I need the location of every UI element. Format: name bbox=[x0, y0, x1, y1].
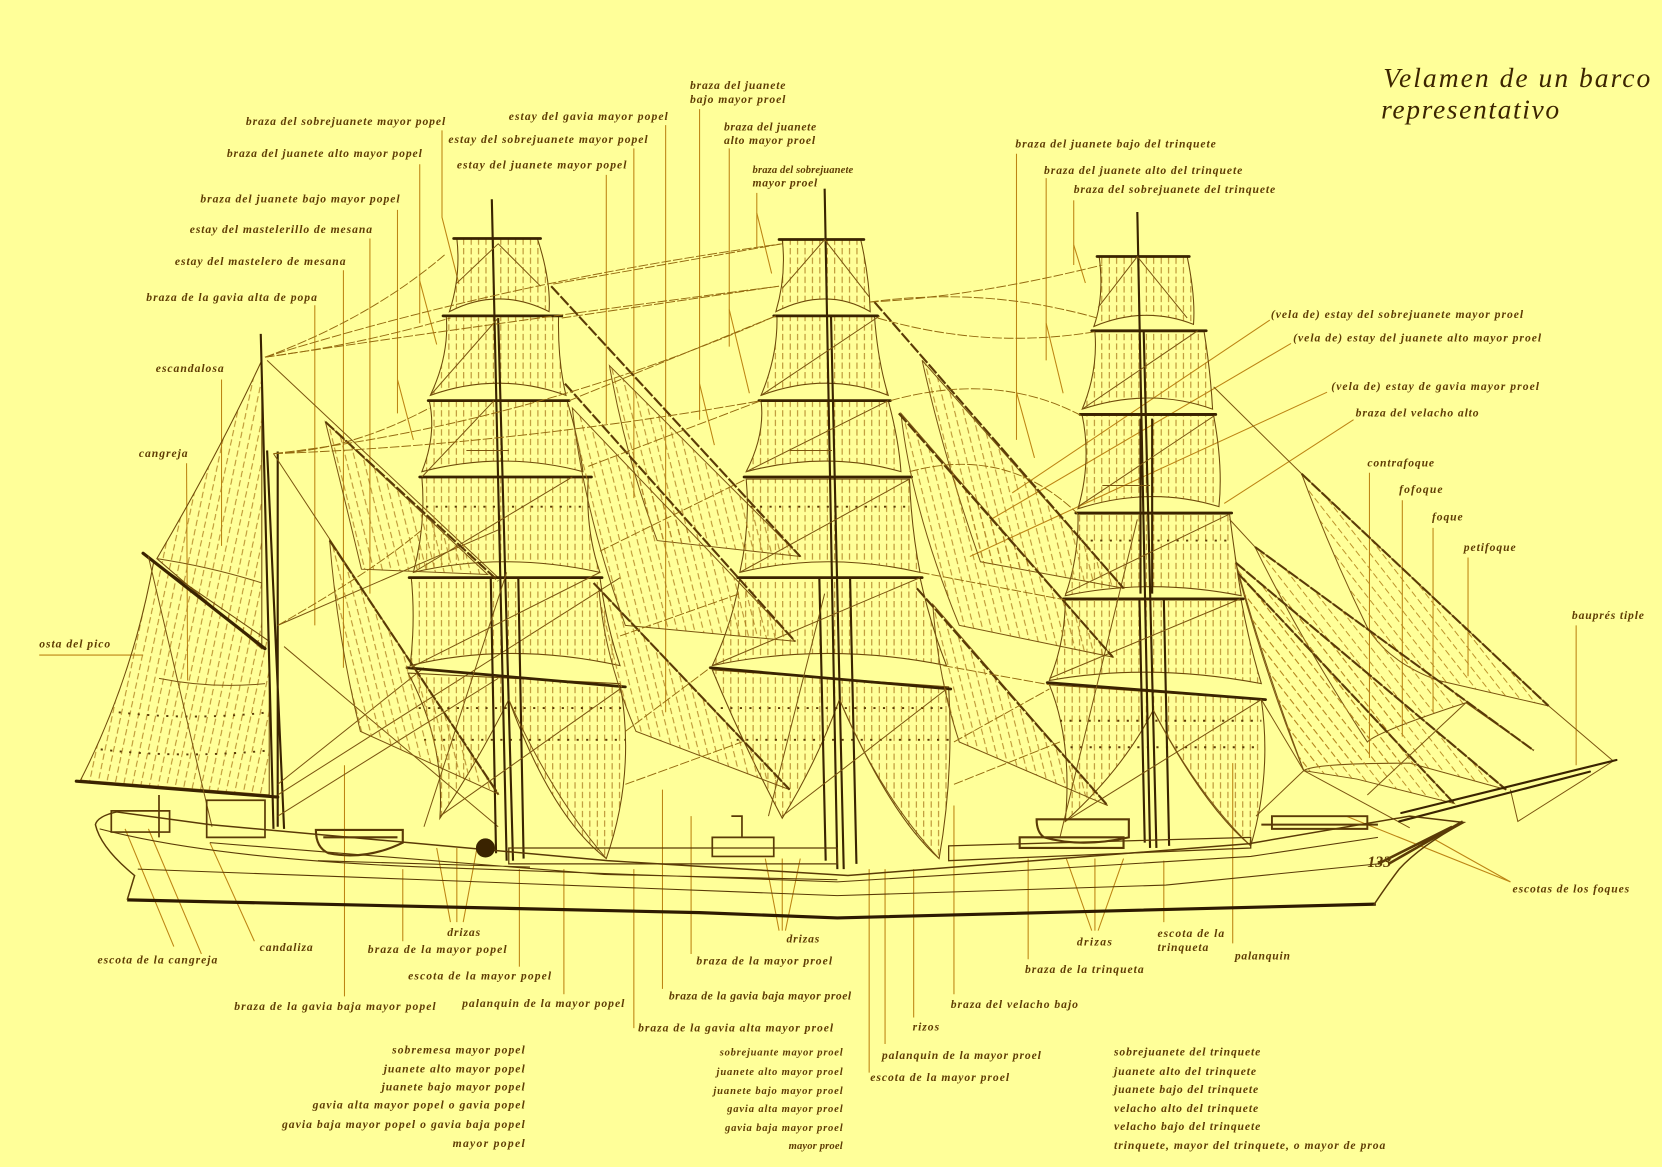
label: escota de la cangreja bbox=[98, 953, 217, 966]
label: juanete bajo mayor popel bbox=[380, 1081, 525, 1094]
label: estay del gavia mayor popel bbox=[509, 110, 669, 123]
staysail: mizzen to mast 1 lower bbox=[330, 541, 498, 794]
sail: mayor proel bbox=[712, 670, 950, 859]
label: trinqueta bbox=[1157, 941, 1209, 954]
label: juanete alto mayor popel bbox=[382, 1063, 525, 1076]
sail: gavia baja mayor proel bbox=[712, 578, 947, 666]
bold stays bbox=[325, 286, 1124, 806]
label: velacho alto del trinquete bbox=[1114, 1102, 1258, 1115]
sail: gavia baja mayor popel bbox=[410, 578, 620, 666]
staysail: mast 2 to 3 lower bbox=[933, 604, 1108, 806]
label: (vela de) estay del juanete alto mayor proel bbox=[1293, 331, 1542, 344]
label: cangreja bbox=[139, 447, 188, 460]
label: juanete alto mayor proel bbox=[715, 1067, 843, 1078]
label: escotas de los foques bbox=[1513, 882, 1630, 895]
reef bands bbox=[1060, 541, 1261, 747]
label: braza del velacho alto bbox=[1356, 407, 1479, 420]
staysail: mast 1 to 2 upper bbox=[609, 366, 800, 556]
label: rizos bbox=[913, 1020, 940, 1033]
gaff and boom bbox=[76, 553, 278, 797]
label: braza del juanete alto del trinquete bbox=[1044, 164, 1242, 177]
hull number: 133 bbox=[1367, 854, 1391, 871]
sail: trinquete bbox=[1049, 685, 1265, 846]
label: braza de la mayor popel bbox=[368, 943, 507, 956]
label: foque bbox=[1432, 510, 1463, 523]
sail list: mayor proel bbox=[711, 1048, 843, 1152]
staysail: mizzen to mast 1 upper bbox=[325, 422, 488, 574]
staysail: mast 2 to 3 upper bbox=[922, 360, 1124, 588]
label: braza de la gavia baja mayor proel bbox=[669, 990, 852, 1003]
label: gavia alta mayor popel o gavia popel bbox=[312, 1099, 525, 1112]
label: escota de la mayor popel bbox=[408, 969, 552, 982]
sail: gavia alta mayor proel bbox=[740, 479, 920, 572]
label: gavia baja mayor popel o gavia baja popel bbox=[281, 1118, 525, 1131]
sail: juanete bajo del trinquete bbox=[1078, 415, 1220, 509]
reef bands bbox=[721, 507, 949, 740]
label: braza del sobrejuanete mayor popel bbox=[246, 115, 446, 128]
label: osta del pico bbox=[39, 638, 110, 651]
label: braza de la gavia alta de popa bbox=[146, 291, 317, 304]
boat on deck near mizzen bbox=[316, 830, 403, 855]
yards bbox=[1047, 257, 1266, 700]
title line 2: representativo bbox=[1381, 94, 1559, 125]
deck house mid bbox=[712, 816, 774, 856]
label: velacho bajo del trinquete bbox=[1114, 1120, 1260, 1133]
label: alto mayor proel bbox=[724, 134, 816, 147]
mizzen mast and gaff sails bbox=[76, 334, 620, 829]
label: braza del juanete bajo del trinquete bbox=[1015, 137, 1216, 150]
label: escandalosa bbox=[156, 362, 224, 375]
mast 1 square sails bbox=[407, 199, 626, 861]
label: braza de la mayor proel bbox=[696, 955, 833, 968]
jib sails and bowsprit bbox=[1214, 387, 1616, 828]
label: palanquin de la mayor proel bbox=[881, 1049, 1042, 1062]
staysail: mast 2 to 3 middle bbox=[901, 413, 1113, 657]
sail: contrafoque bbox=[1238, 573, 1454, 803]
jib stays bbox=[1236, 474, 1549, 803]
cangreja reef bands bbox=[101, 712, 269, 754]
sheer lines bbox=[100, 829, 1378, 896]
labels top left bbox=[39, 115, 446, 651]
label: braza del sobrejuanete del trinquete bbox=[1074, 183, 1275, 196]
figurehead bbox=[1378, 821, 1463, 864]
mast bbox=[1137, 212, 1169, 848]
label: bauprés tiple bbox=[1572, 609, 1644, 622]
label: candaliza bbox=[260, 941, 313, 954]
staysail: mast 1 to 2 middle bbox=[572, 408, 795, 641]
staysail: mast 1 to 2 lower bbox=[599, 588, 790, 790]
leader lines bbox=[39, 109, 1576, 1073]
keel bbox=[127, 900, 1376, 918]
label: drizas bbox=[447, 926, 481, 939]
label: braza del sobrejuanete bbox=[753, 165, 854, 176]
sail: escandalosa bbox=[157, 360, 262, 649]
sail list: trinquete bbox=[1112, 1046, 1386, 1152]
label: braza de la gavia alta mayor proel bbox=[638, 1021, 834, 1034]
label: contrafoque bbox=[1367, 456, 1434, 469]
label: braza del juanete bbox=[690, 79, 785, 92]
labels top centre bbox=[448, 79, 854, 190]
label: (vela de) estay de gavia mayor proel bbox=[1331, 380, 1540, 393]
label: estay del mastelero de mesana bbox=[175, 255, 346, 268]
staysails between masts bbox=[325, 286, 1124, 806]
label: fofoque bbox=[1399, 483, 1443, 496]
yards bbox=[407, 238, 625, 687]
label: escota de la mayor proel bbox=[870, 1071, 1010, 1084]
sail: juanete bajo mayor popel bbox=[422, 401, 583, 472]
sail: velacho bajo del trinquete bbox=[1049, 600, 1261, 684]
sail: petifoque bbox=[1302, 474, 1549, 706]
mizzen mast bbox=[261, 334, 284, 829]
sail: foque bbox=[1255, 547, 1534, 750]
label: trinquete, mayor del trinquete, o mayor de proa bbox=[1114, 1139, 1386, 1152]
mast bbox=[819, 189, 856, 869]
crossing rigging bbox=[1049, 257, 1261, 846]
sail: sobrejuanete del trinquete bbox=[1094, 257, 1194, 326]
stern deck fittings bbox=[111, 795, 265, 837]
crossing rigging bbox=[712, 240, 947, 859]
crossing rigging bbox=[410, 244, 620, 859]
bowsprit bbox=[1399, 760, 1616, 821]
label: petifoque bbox=[1463, 541, 1516, 554]
label: sobrejuante mayor proel bbox=[719, 1048, 843, 1059]
label: braza del juanete alto mayor popel bbox=[227, 147, 423, 160]
fore deck gear bbox=[1261, 816, 1378, 829]
long braces bbox=[265, 244, 1102, 784]
sail: juanete alto mayor proel bbox=[761, 316, 888, 395]
label: sobrejuanete del trinquete bbox=[1113, 1046, 1260, 1059]
label: palanquin de la mayor popel bbox=[461, 997, 625, 1010]
label: juanete alto del trinquete bbox=[1112, 1065, 1256, 1078]
mast bbox=[491, 199, 524, 861]
labels top right bbox=[1015, 137, 1644, 895]
deck rail bbox=[509, 837, 1251, 864]
label: braza del velacho bajo bbox=[951, 998, 1078, 1011]
labels below hull bbox=[98, 926, 1290, 1084]
label: mayor proel bbox=[789, 1141, 843, 1152]
label: braza de la trinqueta bbox=[1025, 963, 1144, 976]
rigging to bowsprit bbox=[1214, 387, 1613, 828]
title bbox=[1381, 62, 1650, 125]
label: gavia alta mayor proel bbox=[726, 1104, 843, 1115]
sail: sobrejuanete mayor proel bbox=[776, 240, 870, 312]
yards bbox=[710, 240, 951, 689]
label: sobremesa mayor popel bbox=[391, 1044, 525, 1057]
label: drizas bbox=[786, 932, 820, 945]
sail: mayor popel bbox=[408, 673, 626, 859]
sail: juanete bajo mayor proel bbox=[746, 401, 901, 472]
label: mayor proel bbox=[753, 177, 818, 190]
reef bands bbox=[419, 507, 625, 740]
label: gavia baja mayor proel bbox=[724, 1123, 843, 1134]
sail: juanete alto mayor popel bbox=[430, 316, 566, 395]
sail: fofoque bbox=[1236, 563, 1506, 790]
sail: sobremesa mayor popel bbox=[449, 238, 549, 312]
label: mayor popel bbox=[453, 1137, 525, 1150]
sail: juanete alto del trinquete bbox=[1082, 332, 1213, 409]
sail: velacho alto del trinquete bbox=[1065, 514, 1241, 596]
mast 3 square sails bbox=[1047, 212, 1266, 848]
sail: cangreja bbox=[81, 562, 269, 795]
label: estay del sobrejuanete mayor popel bbox=[448, 133, 648, 146]
label: (vela de) estay del sobrejuanete mayor proel bbox=[1271, 308, 1524, 321]
label: bajo mayor proel bbox=[690, 93, 786, 106]
label: drizas bbox=[1077, 935, 1112, 948]
label: estay del mastelerillo de mesana bbox=[190, 223, 372, 236]
label: braza del juanete bbox=[724, 120, 816, 133]
capstan wheel bbox=[476, 838, 495, 857]
label: juanete bajo del trinquete bbox=[1112, 1083, 1258, 1096]
hull bbox=[95, 795, 1464, 918]
hull outline bbox=[95, 812, 1464, 905]
label: braza del juanete bajo mayor popel bbox=[200, 192, 400, 205]
label: braza de la gavia baja mayor popel bbox=[234, 1000, 436, 1013]
label: escota de la bbox=[1157, 927, 1224, 940]
label: juanete bajo mayor proel bbox=[711, 1086, 843, 1097]
mizzen stays bbox=[148, 360, 620, 827]
sail list: mayor popel bbox=[281, 1044, 525, 1150]
mast 2 square sails bbox=[710, 189, 951, 869]
label: palanquin bbox=[1234, 949, 1290, 962]
boat on deck forward bbox=[1020, 819, 1129, 848]
label: estay del juanete mayor popel bbox=[457, 159, 627, 172]
sail: gavia alta mayor popel bbox=[413, 477, 600, 572]
title line 1: Velamen de un barco bbox=[1383, 62, 1650, 93]
